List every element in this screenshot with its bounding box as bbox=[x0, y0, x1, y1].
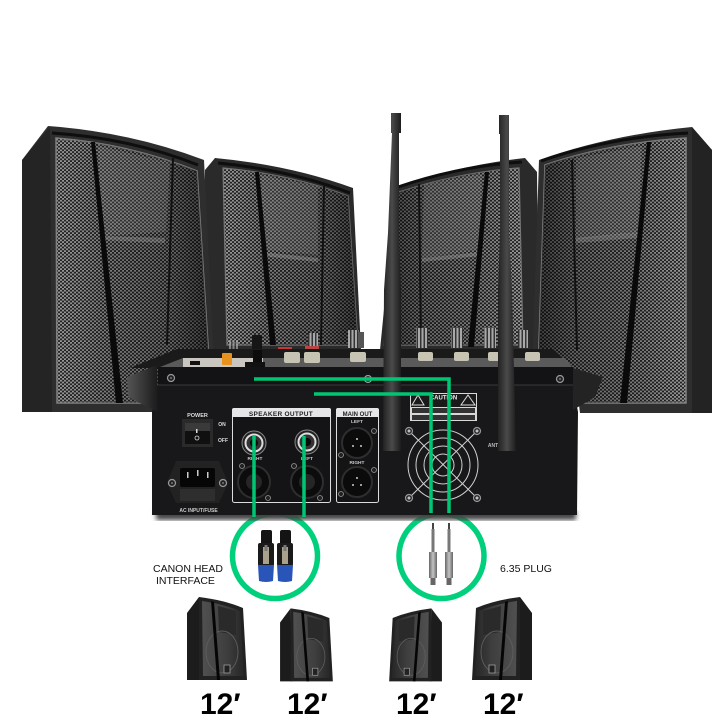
power switch: OFF bbox=[218, 438, 228, 444]
speaker: large inner left bbox=[205, 158, 361, 350]
label: 6.35 plug: 6.35 PLUG bbox=[500, 563, 552, 575]
mixer top knobs bbox=[229, 328, 528, 351]
mixer rear panel bbox=[152, 385, 578, 515]
icon: 6.35 plugs bbox=[429, 523, 453, 585]
small speaker 3 bbox=[389, 608, 442, 681]
power switch: POWER bbox=[187, 413, 208, 419]
speaker: large outer right bbox=[532, 127, 712, 413]
caution label: CAUTION bbox=[430, 396, 457, 402]
speaker: large inner right bbox=[380, 158, 539, 350]
speaker output panel: LEFT bbox=[301, 456, 313, 462]
speaker output panel bbox=[232, 408, 331, 502]
mixer top plate bbox=[130, 349, 573, 368]
mixer front strip bbox=[158, 367, 573, 385]
size labels: 12′ bbox=[396, 688, 437, 721]
small speaker 1 bbox=[187, 597, 247, 680]
small speaker 2 bbox=[280, 608, 333, 681]
label: canon head interface: CANON HEAD bbox=[153, 563, 223, 575]
power switch bbox=[182, 413, 228, 447]
label: canon head interface bbox=[153, 563, 223, 587]
strip screws bbox=[168, 374, 174, 382]
main out panel: MAIN OUT bbox=[343, 412, 373, 418]
size labels: 12′ bbox=[483, 688, 524, 721]
green circle: speakon connectors bbox=[232, 514, 318, 598]
size labels bbox=[200, 688, 524, 721]
speaker: large outer left bbox=[22, 126, 213, 412]
mixer left handle bbox=[127, 365, 158, 412]
mixer bbox=[127, 328, 603, 520]
main out panel bbox=[336, 408, 379, 502]
speaker output panel: RIGHT bbox=[248, 456, 263, 462]
antenna port label: ANT bbox=[488, 443, 498, 449]
main out panel: LEFT bbox=[351, 419, 363, 425]
green circle: 6.35 plugs bbox=[399, 514, 484, 598]
label: canon head interface: INTERFACE bbox=[156, 575, 215, 587]
power switch: ON bbox=[218, 422, 226, 428]
mixer shadow bbox=[156, 511, 576, 520]
speaker output panel: SPEAKER OUTPUT bbox=[249, 411, 313, 418]
AC input socket bbox=[167, 461, 228, 514]
cooling fan bbox=[406, 428, 480, 502]
antenna left bbox=[383, 113, 401, 451]
size labels: 12′ bbox=[287, 688, 328, 721]
AC input socket: AC INPUT/FUSE bbox=[179, 508, 218, 514]
mixer right handle bbox=[573, 368, 603, 410]
caution label bbox=[410, 393, 477, 421]
icon: speakon connectors bbox=[258, 530, 293, 582]
green connection lines bbox=[254, 379, 449, 517]
mixer connectors bbox=[284, 352, 540, 363]
small speaker 4 bbox=[472, 597, 532, 680]
main out panel: RIGHT bbox=[350, 460, 365, 466]
antenna right bbox=[498, 115, 516, 451]
size labels: 12′ bbox=[200, 688, 241, 721]
